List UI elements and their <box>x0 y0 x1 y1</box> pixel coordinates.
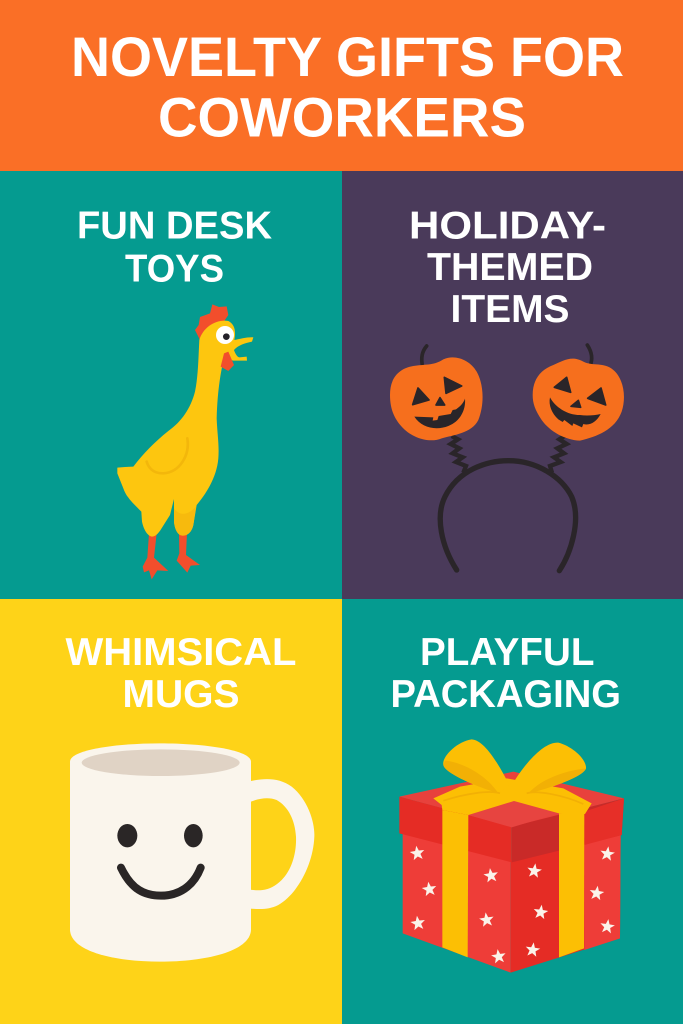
heading: whimsical mugs: WHIMSICAL <box>66 631 296 674</box>
heading: holiday-themed items <box>409 204 606 331</box>
heading: fun desk toys: TOYS <box>125 248 224 290</box>
bow <box>443 739 586 804</box>
icon: pumpkin headband <box>390 345 624 571</box>
heading: holiday-themed items: ITEMS <box>450 288 570 331</box>
title <box>71 25 624 148</box>
springs <box>451 435 567 473</box>
heading: fun desk toys <box>77 204 272 290</box>
left pumpkin <box>390 346 483 440</box>
heading: playful packaging: PACKAGING <box>390 673 621 716</box>
panel: fun desk toys <box>0 171 342 599</box>
heading: fun desk toys: FUN DESK <box>77 204 272 248</box>
star decorations <box>409 845 616 964</box>
panel: playful packaging <box>342 599 683 1024</box>
title: COWORKERS <box>158 86 526 148</box>
right pumpkin <box>533 345 624 441</box>
heading: whimsical mugs <box>66 631 296 716</box>
icon: smiling mug <box>70 743 314 962</box>
icon: rubber chicken <box>117 304 253 579</box>
panel: whimsical mugs <box>0 599 342 1024</box>
heading: holiday-themed items: THEMED <box>427 246 593 289</box>
title: NOVELTY GIFTS FOR <box>71 25 624 88</box>
headband <box>440 461 576 571</box>
icon: gift box <box>399 739 624 973</box>
heading: whimsical mugs: MUGS <box>122 673 240 716</box>
title banner <box>0 0 683 171</box>
heading: playful packaging: PLAYFUL <box>420 631 594 674</box>
heading: holiday-themed items: HOLIDAY- <box>409 204 606 248</box>
heading: playful packaging <box>390 631 621 716</box>
panel: holiday-themed items <box>342 171 683 599</box>
